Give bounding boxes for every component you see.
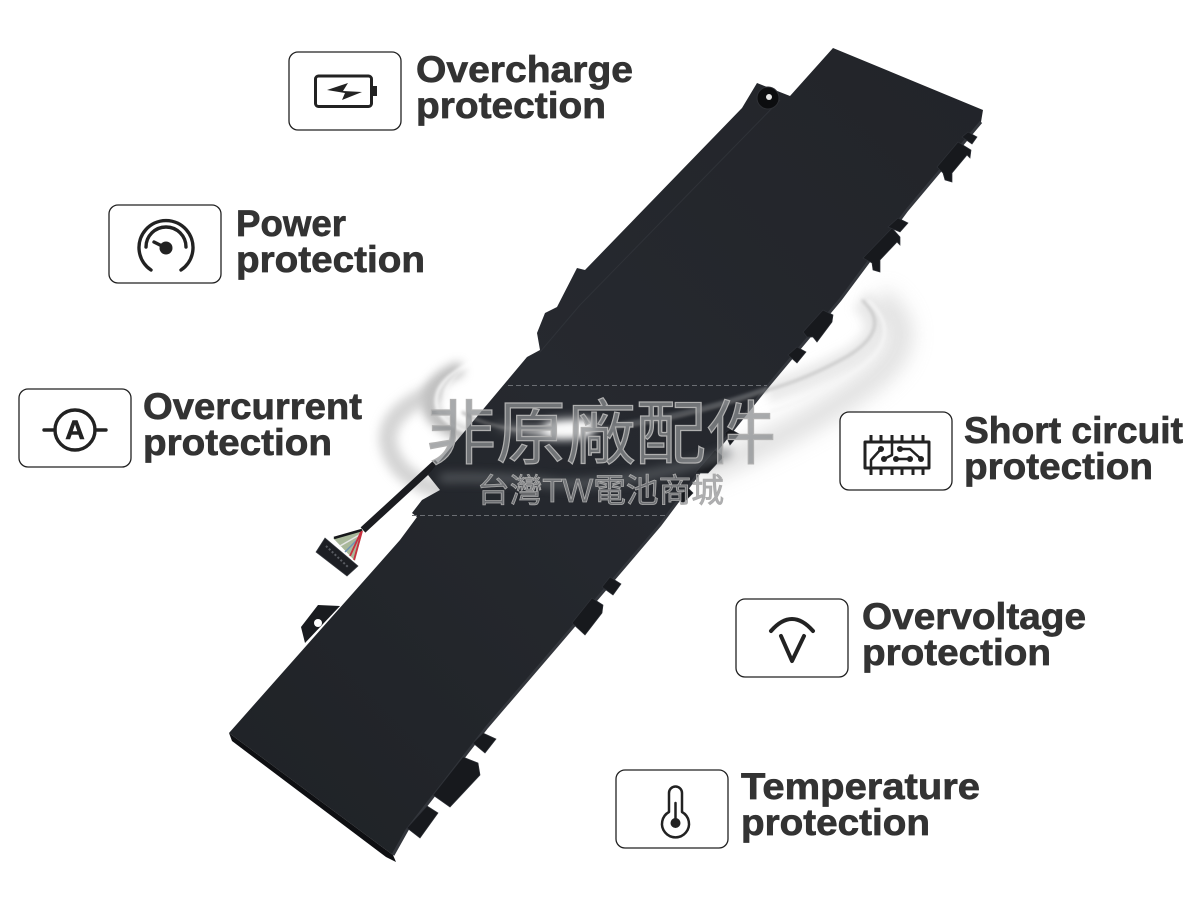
label: overcharge protection: protection bbox=[416, 85, 606, 126]
feature: power protection bbox=[109, 203, 425, 283]
label: overvoltage protection: protection bbox=[862, 632, 1051, 673]
icon: thermometer bbox=[616, 770, 728, 848]
feature: short circuit protection bbox=[840, 410, 1183, 490]
label: temperature protection: Temperature bbox=[741, 766, 980, 807]
label: short circuit protection: protection bbox=[964, 446, 1153, 487]
label: overcurrent protection: Overcurrent bbox=[143, 386, 362, 427]
cable connector bbox=[316, 530, 363, 576]
battery right side rim bbox=[393, 122, 981, 855]
feature: temperature protection bbox=[616, 766, 980, 848]
watermark dashed frame lines bbox=[412, 386, 767, 516]
icon: gauge bbox=[109, 205, 221, 283]
battery main shell bbox=[229, 48, 983, 855]
label: power protection: Power bbox=[236, 203, 346, 244]
battery lower rim bbox=[229, 733, 396, 862]
label: overcharge protection: Overcharge bbox=[416, 49, 633, 90]
side clips bbox=[407, 132, 977, 838]
label: overcurrent protection: protection bbox=[143, 422, 332, 463]
mounting tab bbox=[301, 605, 340, 643]
watermark: small text: 台灣TW電池商城 bbox=[477, 472, 724, 509]
battery: body and connector bbox=[229, 48, 983, 862]
screw mount bbox=[757, 87, 779, 109]
feature: overcurrent protection bbox=[19, 386, 362, 467]
label: short circuit protection: Short circuit bbox=[964, 410, 1183, 451]
icon: ammeter bbox=[19, 389, 131, 467]
label: temperature protection: protection bbox=[741, 802, 930, 843]
swirl: back rings behind the battery bbox=[388, 298, 900, 492]
icon: battery charge bbox=[289, 52, 401, 130]
label: power protection: protection bbox=[236, 239, 425, 280]
watermark: large text: 非原廠配件 bbox=[426, 395, 776, 473]
icon: voltage bbox=[736, 599, 848, 677]
swirl: front highlights across the battery bbox=[440, 388, 767, 484]
label: overvoltage protection: Overvoltage bbox=[862, 596, 1086, 637]
icon: ammeter: A bbox=[65, 415, 85, 445]
feature: overvoltage protection bbox=[736, 596, 1086, 677]
icon: circuit chip bbox=[840, 412, 952, 490]
feature: overcharge protection bbox=[289, 49, 633, 130]
battery cable bbox=[363, 462, 437, 530]
